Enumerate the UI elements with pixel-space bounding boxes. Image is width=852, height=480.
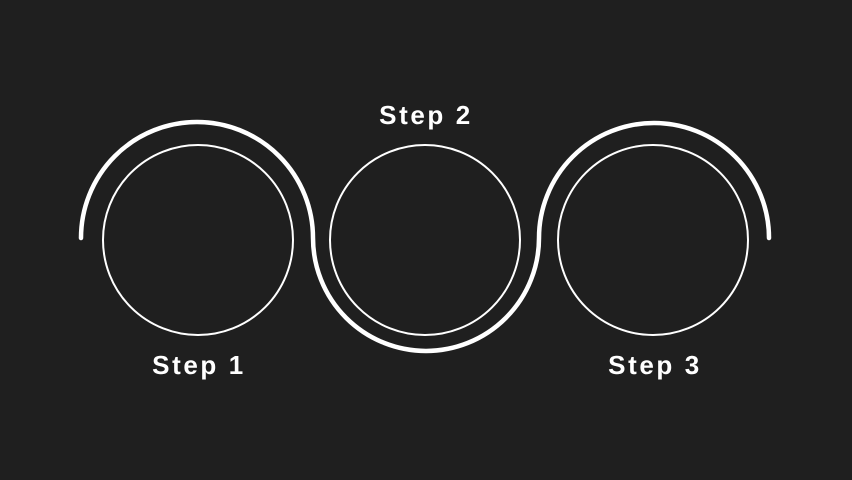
circle: step 1: [103, 145, 293, 335]
circle: step 3: [558, 145, 748, 335]
circle: step 2: [330, 145, 520, 335]
wave connector line: [81, 122, 769, 351]
label: Step 2: Step 2: [379, 100, 473, 130]
label: Step 3: Step 3: [608, 350, 702, 380]
label: Step 1: Step 1: [152, 350, 246, 380]
